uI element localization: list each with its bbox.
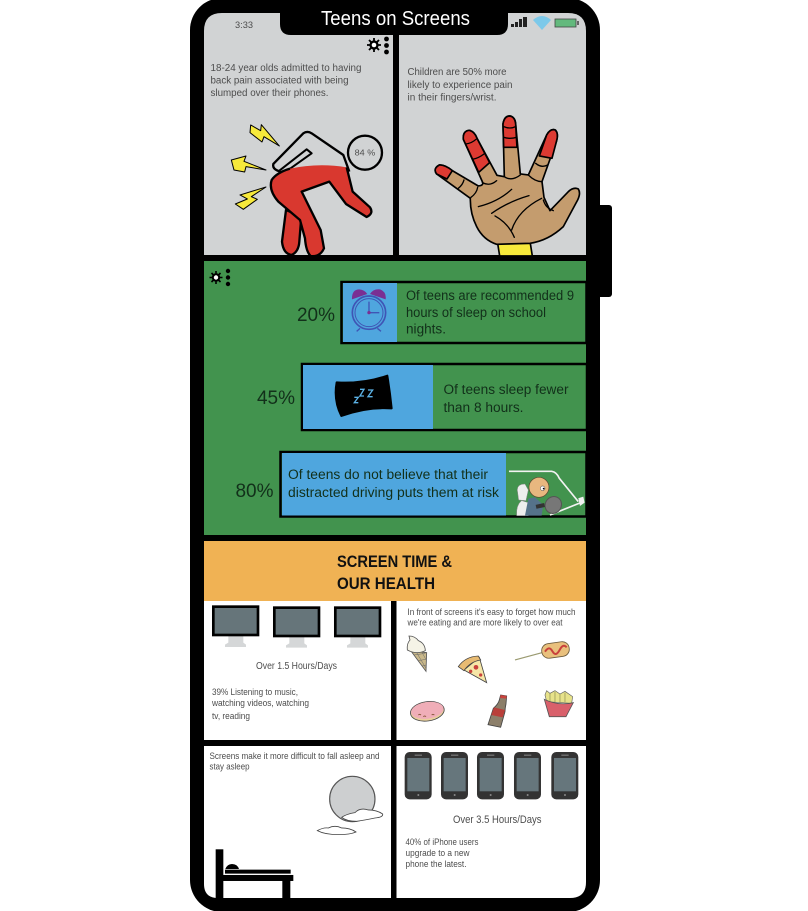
phone description: 40% of iPhone users [406, 837, 479, 847]
phone body [190, 0, 600, 911]
panel: sleep difficulty [204, 746, 391, 899]
finger pain text: Children are 50% more [408, 67, 507, 78]
finger pain text [408, 67, 512, 104]
red fingertips [435, 116, 557, 179]
stat: 20 percent: 20% [297, 305, 335, 326]
stat: 80 percent: distracted driving puts them at risk [288, 485, 499, 500]
stat: 45 percent: 45% [257, 388, 295, 409]
title: Teens on Screens [321, 8, 470, 30]
panel: phone hours [396, 746, 586, 898]
side button [590, 205, 612, 297]
panel: computer hours [204, 601, 391, 740]
bottle [488, 695, 507, 727]
panel: overeating [396, 601, 586, 740]
torso [273, 132, 349, 173]
panel: sleep and driving statistics [204, 261, 587, 535]
pizza [458, 656, 487, 683]
illustration: moon and clouds [317, 776, 383, 835]
icon: distracted driver [509, 471, 585, 517]
fries [544, 691, 573, 717]
overeating text: we're eating and are more likely to over eat [407, 618, 563, 628]
finger pain text: in their fingers/wrist. [408, 92, 496, 104]
icons: junk food [407, 636, 573, 727]
hours label: Over 3.5 Hours/Days [453, 814, 542, 826]
illustration: person with back pain: 84 % [355, 148, 376, 158]
illustration: person with back pain [231, 125, 382, 256]
computer description [211, 687, 309, 721]
stat: 45 percent: than 8 hours. [444, 400, 524, 415]
stat: 20 percent [297, 282, 586, 343]
back pain text: back pain associated with being [210, 76, 348, 86]
percent circle [348, 136, 382, 170]
phone description: upgrade to a new [406, 848, 470, 858]
icon: settings gear [367, 37, 389, 54]
icon: wifi [533, 16, 551, 30]
illustration: hand [435, 116, 580, 256]
icon: signal [511, 17, 527, 27]
ice cream [407, 636, 427, 671]
back pain text: slumped over their phones. [210, 88, 328, 99]
stat: 80 percent: 80% [236, 481, 274, 502]
wristband [498, 243, 532, 256]
icon: alarm clock [352, 289, 386, 331]
icons: three monitors [213, 607, 380, 648]
stat: 45 percent [257, 364, 587, 430]
illustration: bed [216, 849, 293, 899]
stat: 45 percent: Of teens sleep fewer [444, 382, 569, 397]
computer description: tv, reading [212, 711, 250, 721]
donut [409, 699, 446, 723]
stat: 20 percent: nights. [406, 322, 446, 336]
status bar [235, 16, 579, 30]
notch with title [280, 0, 508, 35]
heading banner [204, 541, 586, 601]
sleep text: Screens make it more difficult to fall asleep and [210, 751, 380, 762]
clock: 3:33 [235, 20, 253, 30]
stat: 80 percent [236, 452, 586, 517]
red body and front leg [271, 165, 371, 256]
panel: finger pain [399, 13, 586, 256]
phone description [406, 837, 479, 869]
icons: five phones [405, 752, 578, 799]
palm and fingers [435, 116, 580, 244]
computer description: watching videos, watching [211, 698, 309, 708]
icon: pillow [336, 376, 392, 416]
stat: 80 percent: Of teens do not believe that their [288, 467, 489, 482]
panel: back pain [204, 13, 393, 256]
corn dog [515, 641, 570, 660]
heading: SCREEN TIME & [337, 552, 452, 571]
computer description: 39% Listening to music, [212, 687, 298, 697]
lightning bolts [231, 125, 279, 209]
overeating text [407, 607, 576, 628]
heading: OUR HEALTH [337, 574, 435, 593]
sleep text: stay asleep [210, 762, 250, 772]
stat: 20 percent: Of teens are recommended 9 [406, 288, 574, 303]
icon: battery [555, 19, 579, 27]
hours label: Over 1.5 Hours/Days [256, 661, 337, 672]
phone description: phone the latest. [406, 859, 466, 869]
back leg [282, 210, 301, 255]
finger pain text: likely to experience pain [408, 80, 512, 91]
overeating text: In front of screens it's easy to forget how much [408, 607, 576, 618]
stat: 20 percent: hours of sleep on school [406, 305, 546, 320]
finger joints and palm lines [458, 127, 553, 237]
back pain text [210, 63, 362, 99]
sleep text [210, 751, 380, 772]
icon: settings gear [210, 269, 230, 286]
back pain text: 18-24 year olds admitted to having [210, 63, 362, 74]
